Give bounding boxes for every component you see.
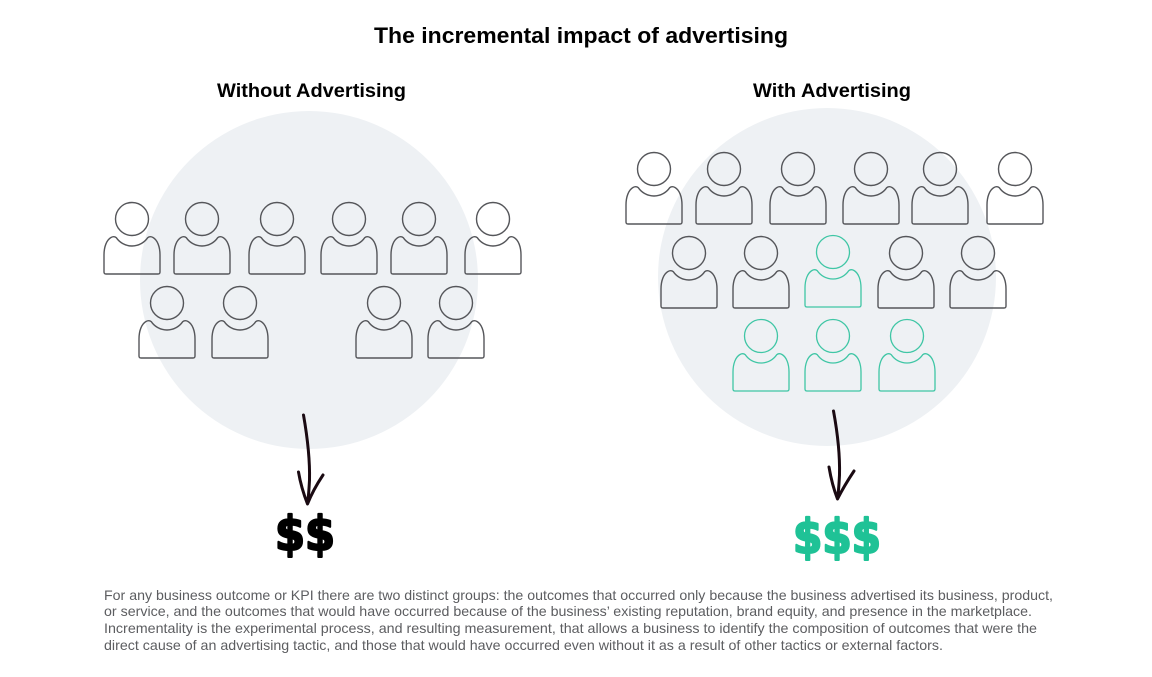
person [987, 152, 1043, 224]
person [843, 152, 899, 224]
person [626, 152, 682, 224]
description text [104, 588, 1053, 653]
person [770, 152, 826, 224]
description text: or service, and the outcomes that would have occurred because of the business’ existing reputation, brand equity, and presence in the marketplace. [104, 604, 1032, 619]
person [212, 286, 268, 358]
person [139, 286, 195, 358]
background circle right [658, 108, 996, 446]
panel: without advertising group [104, 111, 521, 449]
person [912, 152, 968, 224]
person [878, 236, 934, 308]
person [249, 202, 305, 274]
heading: with advertising: With Advertising [753, 81, 911, 102]
description text: Incrementality is the experimental process, and resulting measurement, that allows a business to identify the composition of outcomes that were the [104, 621, 1037, 636]
person [696, 152, 752, 224]
person [356, 286, 412, 358]
description text: For any business outcome or KPI there are two distinct groups: the outcomes that occurred only because the business advertised its business, product, [104, 588, 1053, 603]
person [465, 202, 521, 274]
arrow: left [298, 415, 323, 504]
person [174, 202, 230, 274]
person: incremental [733, 320, 789, 391]
person [104, 202, 160, 274]
person: incremental [805, 236, 861, 307]
person [321, 202, 377, 274]
person [391, 202, 447, 274]
person [661, 236, 717, 308]
person [733, 236, 789, 308]
revenue: three dollars: $$$ [793, 510, 881, 565]
title: The incremental impact of advertising [374, 23, 788, 48]
heading: without advertising: Without Advertising [217, 81, 406, 102]
person: incremental [805, 320, 861, 391]
person: incremental [879, 320, 935, 391]
person [428, 286, 484, 358]
arrow: right [829, 411, 854, 499]
description text: direct cause of an advertising tactic, and those that would have occurred even without it as a result of other tactics or external factors. [104, 638, 943, 653]
person [950, 236, 1006, 308]
revenue: two dollars: $$ [275, 507, 335, 562]
panel: with advertising group [626, 108, 1043, 446]
background circle left [140, 111, 478, 449]
